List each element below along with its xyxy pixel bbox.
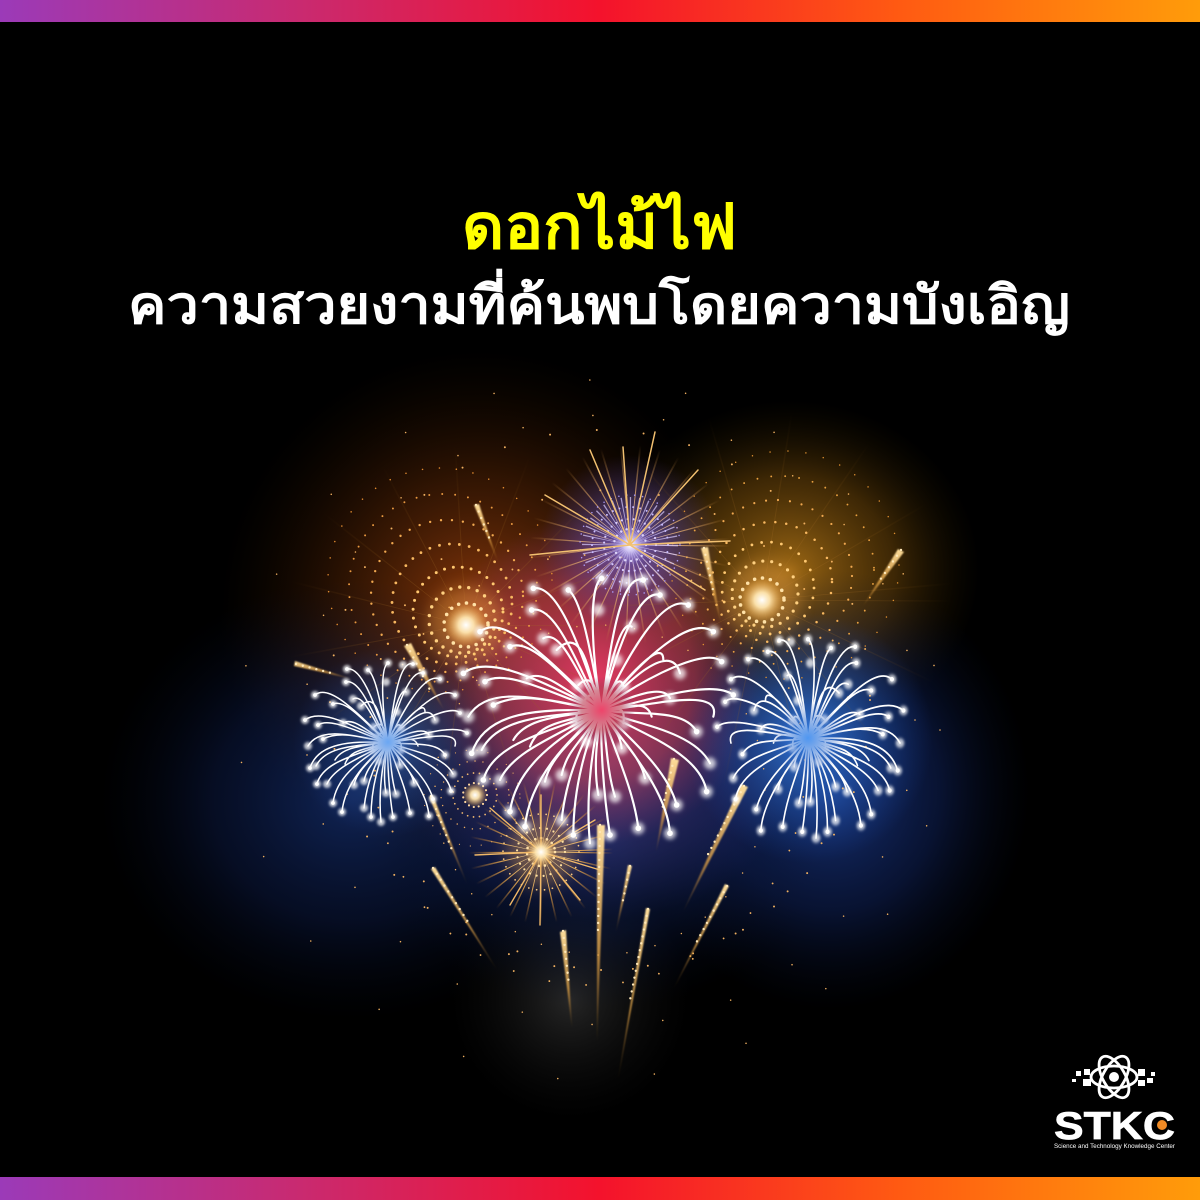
rocket trails (294, 504, 904, 1080)
firework: lower gold burst (475, 795, 600, 925)
coloured glow behind fireworks (100, 350, 1030, 1120)
top gradient bar (0, 0, 1200, 22)
subtitle: white heading: ความสวยงามที่ค้นพบโดยความบังเอิญ (128, 269, 1070, 336)
logo tagline: Science and Technology Knowledge Center (1054, 1144, 1175, 1150)
firework: right blue burst (717, 639, 903, 838)
firework: right gold spark burst (667, 451, 899, 695)
logo orange dot (1157, 1120, 1167, 1130)
bottom gradient bar (0, 1177, 1200, 1200)
logo: STKC (1054, 1052, 1175, 1150)
scattered background sparks (240, 380, 940, 1080)
firework: left gold spark burst (328, 468, 556, 715)
logo wordmark: STKC (1054, 1105, 1175, 1148)
firework: top purple burst (530, 432, 730, 595)
firework: centre pink burst (463, 578, 733, 843)
icon: pixel squares (1072, 1069, 1155, 1086)
firework: small spark cluster (424, 750, 520, 846)
rocket sparks (296, 505, 901, 1000)
title: yellow heading: ดอกไม้ไฟ (462, 191, 737, 262)
firework: left blue burst (305, 663, 467, 822)
icon: atom (1091, 1052, 1137, 1102)
